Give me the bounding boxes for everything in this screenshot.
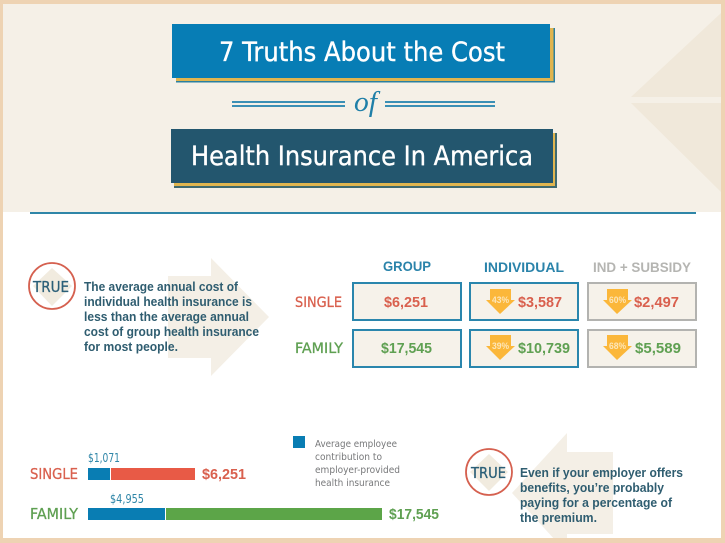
single bar row: SINGLE: [30, 465, 78, 483]
column headers: [383, 258, 692, 275]
single bar row: [30, 451, 246, 483]
cost comparison table: [295, 258, 696, 367]
column headers: IND + SUBSIDY: [593, 259, 692, 275]
single bar row: $6,251: [202, 466, 246, 483]
true statement: employer premium: [466, 449, 683, 525]
statement text: cost of group health insurance: [84, 324, 259, 339]
title banner: Health Insurance In America: Health Insurance In America: [191, 141, 533, 172]
title banner: Health Insurance In America: [171, 129, 557, 188]
TRUE badge: [29, 263, 75, 309]
statement text: paying for a percentage of: [520, 495, 673, 510]
legend: Average employee: [315, 439, 397, 450]
family bar row: $4,955: [110, 492, 144, 506]
down arrows with savings percentages: 39%: [492, 341, 509, 351]
table values: $2,497: [634, 295, 679, 311]
table values: $17,545: [381, 341, 432, 357]
family bar row: [30, 492, 439, 523]
statement text: Even if your employer offers: [520, 465, 683, 480]
header panel: [3, 4, 721, 212]
legend: contribution to: [315, 452, 382, 463]
family bar row: FAMILY: [30, 505, 79, 523]
connector: of: of: [354, 87, 380, 118]
decorative chevron shape: [631, 13, 721, 192]
TRUE badge: TRUE: [470, 464, 506, 482]
legend: health insurance: [315, 478, 390, 489]
down arrows with savings percentages: 68%: [609, 341, 626, 351]
row labels: [295, 295, 343, 357]
column headers: INDIVIDUAL: [484, 259, 564, 275]
column headers: GROUP: [383, 258, 431, 274]
family bar row: $17,545: [389, 506, 439, 523]
bar chart: employee contribution: [30, 436, 439, 523]
statement text: the premium.: [520, 510, 597, 525]
true statement: individual vs group cost: [29, 258, 269, 376]
table values: $6,251: [384, 295, 428, 311]
title banner: 7 Truths About the Cost: [172, 24, 555, 82]
table cells: [353, 283, 696, 367]
statement text: The average annual cost of: [84, 279, 239, 294]
row labels: SINGLE: [295, 295, 342, 311]
section divider: [30, 212, 696, 214]
legend: [293, 436, 400, 489]
table values: $10,739: [518, 341, 570, 357]
statement text: individual health insurance is: [84, 294, 252, 309]
TRUE badge: TRUE: [32, 278, 69, 296]
legend: employer-provided: [315, 465, 400, 476]
table values: [381, 295, 681, 357]
down arrows with savings percentages: 60%: [609, 295, 626, 305]
background arrow pointing left: [512, 433, 613, 543]
statement text: benefits, you’re probably: [520, 480, 665, 495]
single bar row: $1,071: [88, 451, 120, 465]
statement text: [520, 465, 683, 525]
row labels: FAMILY: [295, 341, 343, 357]
down arrows with savings percentages: [486, 289, 632, 360]
statement text: [84, 279, 259, 354]
table values: $5,589: [635, 341, 681, 357]
TRUE badge: [466, 449, 512, 495]
background arrow pointing right: [168, 258, 269, 376]
statement text: for most people.: [84, 339, 178, 354]
title banner: 7 Truths About the Cost: 7 Truths About the Cost: [219, 37, 505, 68]
statement text: less than the average annual: [84, 309, 249, 324]
table values: $3,587: [518, 295, 562, 311]
down arrows with savings percentages: 43%: [492, 295, 509, 305]
